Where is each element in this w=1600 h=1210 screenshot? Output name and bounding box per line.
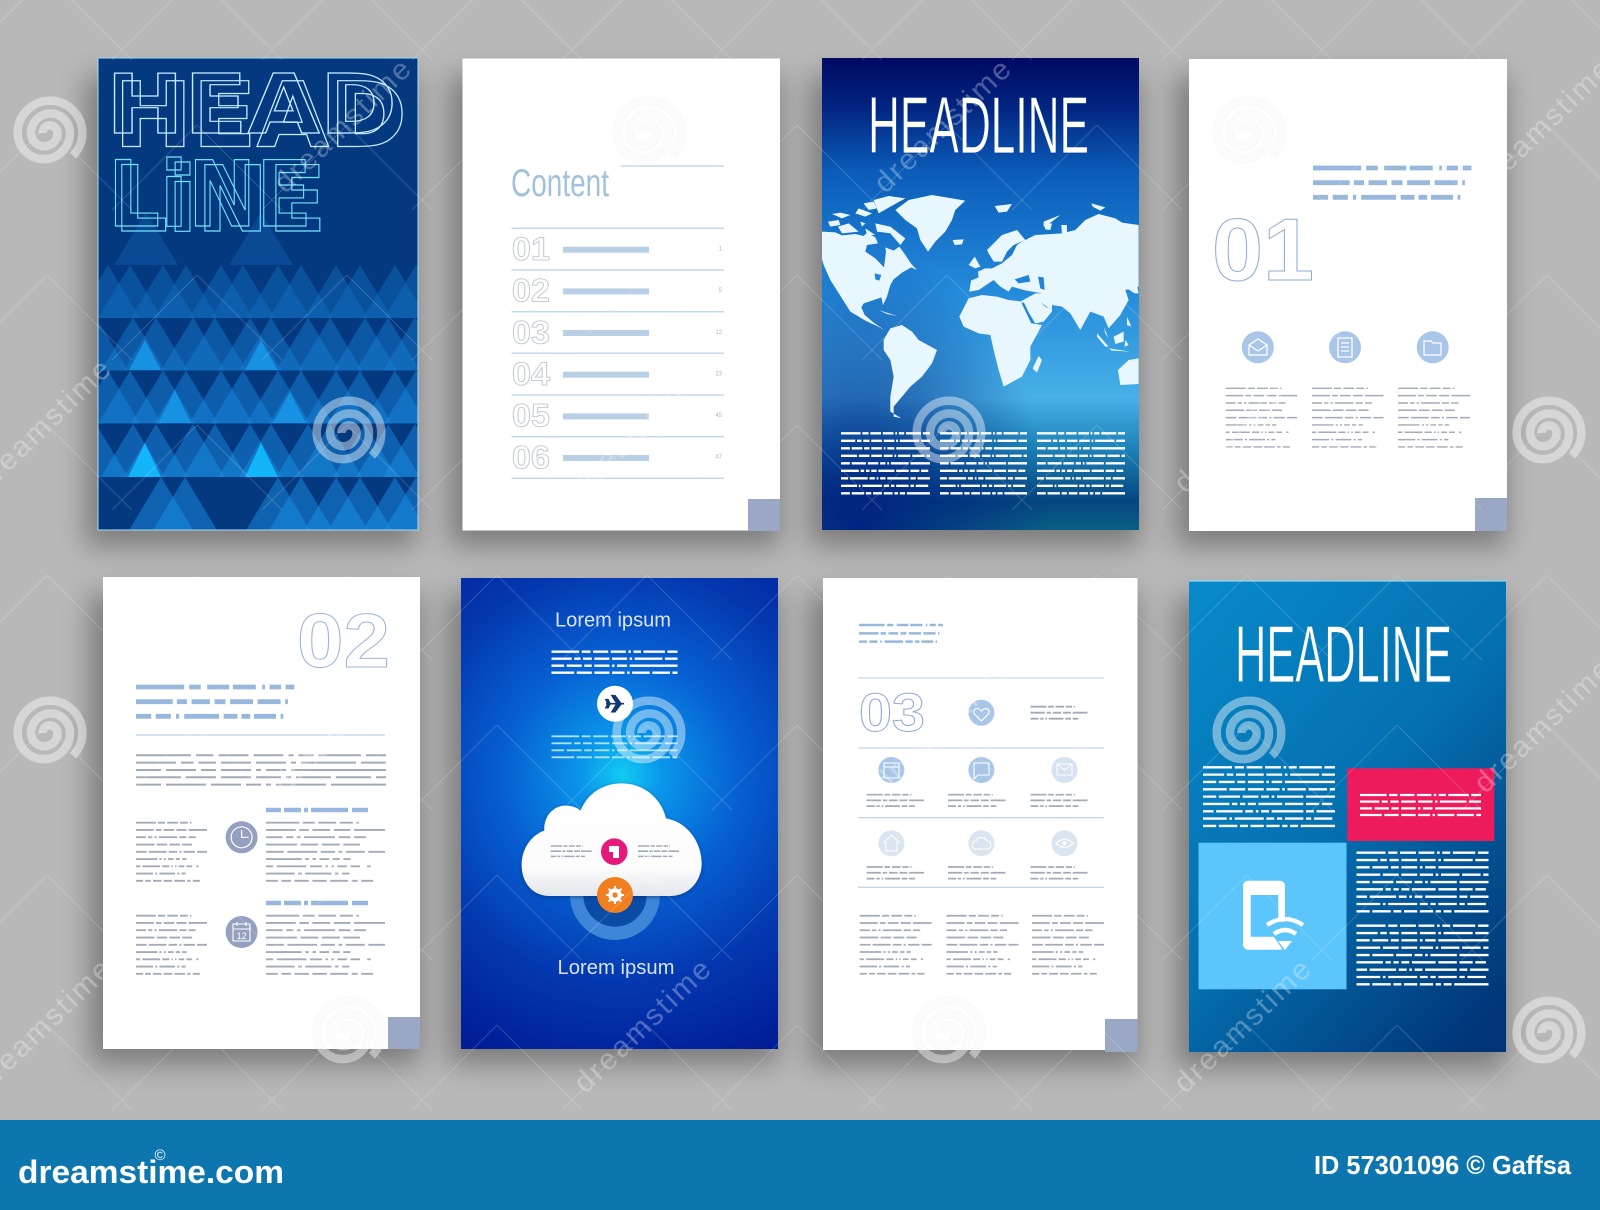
text block row 1 bbox=[136, 823, 385, 881]
title top: Lorem ipsum bbox=[555, 610, 671, 632]
light blue icon box bbox=[1198, 843, 1346, 989]
pink text box bbox=[1347, 768, 1494, 841]
logo text: dreamstime.com bbox=[18, 1154, 284, 1190]
icon: pink badge bbox=[601, 838, 628, 865]
subheading 1 bbox=[266, 808, 368, 812]
outlined chapter numbers: 06 bbox=[512, 439, 550, 475]
watermark text: dreamstime bbox=[567, 353, 718, 500]
watermark text: dreamstime bbox=[1167, 953, 1318, 1100]
text row 2 bbox=[867, 795, 1088, 806]
title bottom: Lorem ipsum bbox=[558, 957, 674, 979]
headline: HEADLINE bbox=[868, 81, 1089, 171]
icon: clock bbox=[226, 821, 258, 853]
panel: mobile headline bbox=[1189, 581, 1506, 1052]
outlined chapter numbers bbox=[512, 231, 550, 475]
outlined chapter numbers: 04 bbox=[512, 356, 550, 392]
page numbers: 47 bbox=[715, 454, 723, 460]
icon: clipboard bbox=[1329, 331, 1361, 363]
page numbers: 1 bbox=[719, 246, 723, 252]
top text bbox=[552, 652, 678, 673]
watermark text: dreamstime bbox=[267, 653, 418, 800]
section number 03: 03 bbox=[859, 683, 925, 743]
corner tab bbox=[388, 1017, 420, 1049]
icon: mail bbox=[1052, 757, 1078, 783]
icon: plane bbox=[597, 686, 633, 722]
text row 3 bbox=[867, 867, 1088, 879]
icon: calendar: 12 bbox=[237, 931, 247, 941]
intro heading text bbox=[1313, 168, 1471, 197]
icon: calendar bbox=[226, 916, 258, 948]
icon: orange gear bbox=[597, 877, 633, 913]
cloud text bbox=[551, 846, 679, 856]
panel: section 01 bbox=[1189, 59, 1507, 531]
watermark text: dreamstime bbox=[567, 953, 718, 1100]
page numbers: 5 bbox=[719, 288, 723, 294]
paragraph bbox=[136, 755, 386, 785]
icon: phone with wifi bbox=[1243, 881, 1307, 953]
headline: HEAD: HEAD bbox=[114, 63, 407, 168]
outlined chapter numbers: 01 bbox=[512, 231, 550, 267]
watermark text: dreamstime bbox=[867, 653, 1018, 800]
watermark text: dreamstime bbox=[267, 53, 418, 200]
heading: Content: Content bbox=[511, 162, 609, 205]
body text columns bbox=[841, 433, 1125, 493]
panel: section 03 bbox=[823, 578, 1138, 1052]
rings behind orange icon bbox=[570, 850, 660, 940]
section number 01: 01 bbox=[1212, 200, 1314, 299]
headline: LINE: LiNE bbox=[114, 148, 326, 253]
watermark text: dreamstime bbox=[867, 53, 1018, 200]
panel: table of contents bbox=[462, 58, 780, 531]
corner tab bbox=[1105, 1019, 1138, 1052]
intro heading text bbox=[859, 625, 943, 642]
logo spiral: © bbox=[154, 1147, 166, 1164]
intro heading text bbox=[136, 687, 294, 716]
right text 1 bbox=[1356, 853, 1488, 911]
panel: section 02 bbox=[103, 577, 420, 1049]
outlined chapter numbers: 05 bbox=[512, 398, 550, 434]
icon: folder bbox=[1417, 331, 1449, 363]
icon: speech bubble bbox=[968, 757, 994, 783]
text columns bbox=[1226, 388, 1470, 447]
page numbers: 45 bbox=[715, 413, 723, 419]
chapter bars bbox=[563, 247, 649, 461]
outlined chapter numbers: 02 bbox=[512, 273, 550, 309]
right text 2 bbox=[1356, 926, 1488, 984]
image id credit: ID 57301096 © Gaffsa bbox=[1314, 1150, 1572, 1180]
subheading 2 bbox=[266, 901, 368, 905]
cloud bbox=[522, 783, 702, 896]
outlined chapter numbers: 03 bbox=[512, 314, 550, 350]
triangle pattern bbox=[98, 212, 418, 530]
icon: cloud bbox=[968, 830, 994, 856]
left text bbox=[1203, 767, 1335, 826]
panel shadows bbox=[86, 76, 1506, 1068]
text block row 2 bbox=[136, 916, 385, 974]
text beside heart bbox=[1030, 707, 1088, 719]
corner tab bbox=[1475, 498, 1507, 531]
section number 02: 02 bbox=[297, 599, 390, 684]
page numbers: 12 bbox=[715, 330, 723, 336]
icon: envelope bbox=[1242, 331, 1274, 363]
watermark spirals bbox=[18, 101, 1581, 1059]
page numbers bbox=[715, 246, 723, 460]
watermark text: dreamstime bbox=[1167, 353, 1318, 500]
icon: calendar bbox=[878, 757, 904, 783]
panel: cover with triangles and outlined headline bbox=[98, 58, 418, 530]
page numbers: 23 bbox=[715, 372, 723, 378]
footer banner bbox=[0, 1120, 1600, 1210]
world map bbox=[822, 195, 1139, 418]
icon: heart bbox=[968, 700, 994, 726]
icon: eye bbox=[1052, 830, 1078, 856]
middle text bbox=[552, 736, 678, 757]
panel: cloud bbox=[461, 578, 778, 1049]
bottom text columns bbox=[860, 916, 1104, 974]
corner tab bbox=[748, 499, 780, 531]
panel: world map cover bbox=[822, 58, 1139, 530]
icon: home bbox=[878, 830, 904, 856]
headline: HEAD: HEAD bbox=[106, 58, 397, 153]
headline: LINE: LiNE bbox=[108, 143, 312, 248]
